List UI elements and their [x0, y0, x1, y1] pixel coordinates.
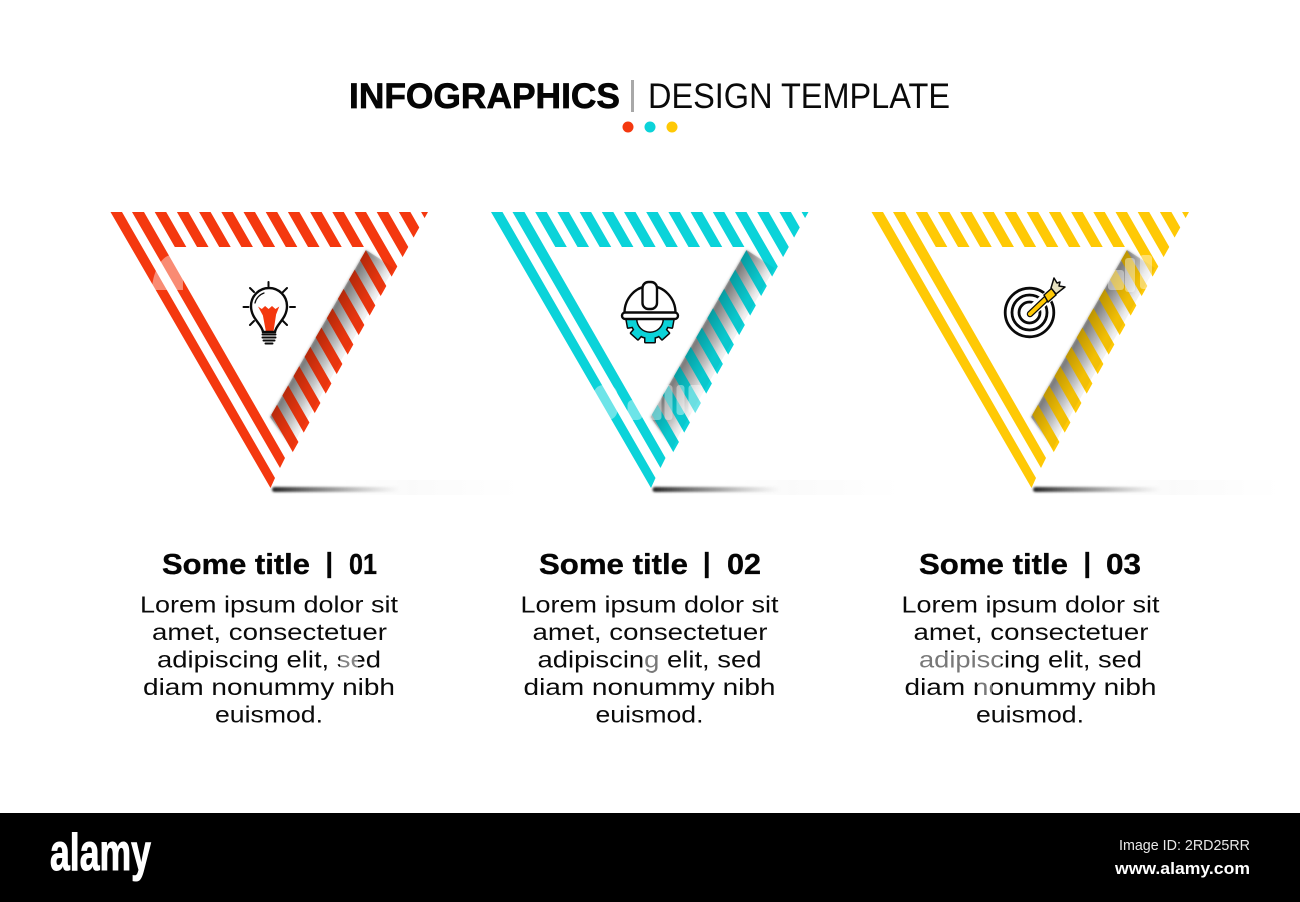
title: INFOGRAPHICS: [349, 77, 620, 116]
heading 03: Some title: [919, 549, 1068, 581]
heading 02: Some title: [539, 549, 688, 581]
icon: helmet with gear: [622, 282, 678, 342]
heading 03: 03: [1106, 549, 1141, 581]
text block 03: euismod.: [976, 702, 1084, 728]
text block 01: adipiscing elit, sed: [157, 646, 381, 672]
icon: light bulb: [244, 282, 295, 344]
heading 01: [162, 549, 377, 581]
heading 03: [919, 549, 1141, 581]
text block 02: euismod.: [596, 702, 704, 728]
text block 02: Lorem ipsum dolor sit: [520, 592, 779, 618]
text block 03: amet, consectetuer: [914, 619, 1149, 645]
text block 03: adipiscing elit, sed: [919, 646, 1142, 672]
text block 01: amet, consectetuer: [152, 619, 387, 645]
text block 01: Lorem ipsum dolor sit: [140, 592, 399, 618]
heading 01: Some title: [162, 549, 310, 581]
title: [349, 77, 950, 116]
alamy logo: alamy: [50, 824, 151, 882]
footer bar: [0, 813, 1300, 902]
heading 02: [539, 549, 761, 581]
text block 01: [140, 592, 399, 728]
text block 02: adipiscing elit, sed: [538, 646, 762, 672]
title dots: [622, 122, 678, 132]
yellow triangle: [872, 212, 1189, 494]
website: www.alamy.com: [1114, 860, 1250, 878]
heading 01: 01: [349, 549, 377, 581]
icon: target with arrow: [1005, 278, 1065, 337]
text block 03: [902, 592, 1160, 728]
heading 02: 02: [727, 549, 761, 581]
text block 02: diam nonummy nibh: [524, 674, 776, 700]
text block 02: amet, consectetuer: [532, 619, 768, 645]
image id: Image ID: 2RD25RR: [1119, 837, 1250, 854]
text block 01: euismod.: [215, 702, 323, 728]
text block 03: Lorem ipsum dolor sit: [902, 592, 1160, 618]
text block 01: diam nonummy nibh: [143, 674, 395, 700]
panel: triangle 01: [110, 212, 428, 722]
panel: triangle 03: [872, 212, 1189, 722]
teal triangle: [491, 212, 808, 494]
text block 03: diam nonummy nibh: [904, 674, 1156, 700]
title: DESIGN TEMPLATE: [648, 77, 950, 116]
red triangle: [110, 212, 428, 494]
panel: triangle 02: [491, 212, 808, 722]
text block 02: [520, 592, 779, 728]
